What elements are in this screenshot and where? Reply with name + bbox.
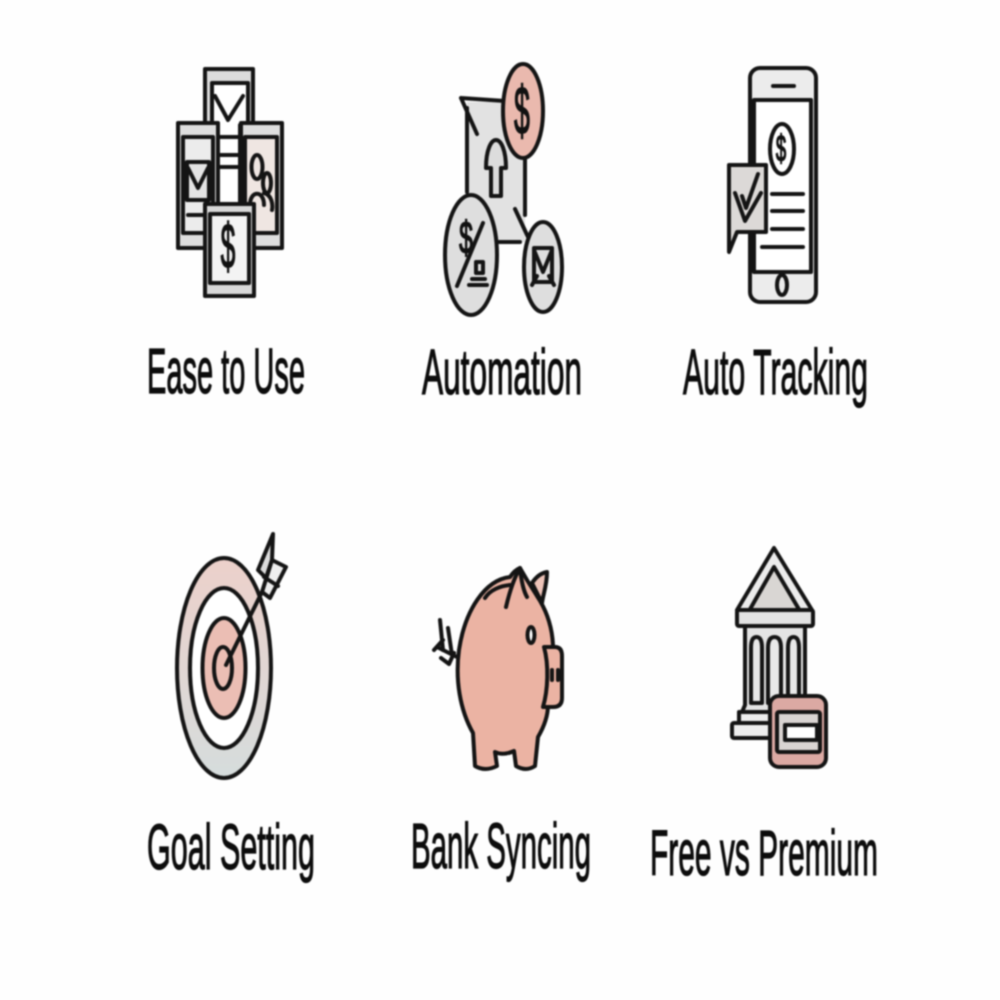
- target rings: [177, 558, 271, 778]
- icon: automation: [445, 64, 562, 315]
- coin slot and ear: [485, 568, 527, 607]
- pig body: [458, 568, 553, 769]
- right contacts card: [241, 123, 282, 248]
- left mail card: [178, 123, 218, 248]
- text lines: [762, 194, 803, 247]
- cost coin: [445, 195, 497, 315]
- premium card: [770, 696, 826, 767]
- top mail card: [205, 69, 253, 209]
- phone body: [750, 68, 816, 302]
- icon: bank with card: [732, 548, 826, 767]
- document with upload arrow: [461, 98, 528, 242]
- home button: [777, 275, 787, 295]
- icon: ease to use cards: [178, 69, 282, 296]
- dollar badge: $: [776, 129, 786, 170]
- bottom dollar card: [205, 204, 254, 296]
- mail coin: [524, 222, 562, 312]
- pediment: [737, 548, 812, 611]
- back ear: [532, 572, 547, 603]
- arrow: [226, 534, 286, 665]
- dollar badge: [770, 124, 794, 174]
- columns: [742, 626, 805, 712]
- dollar coin: [503, 64, 543, 158]
- text: Automation: [422, 336, 582, 408]
- cost coin: $: [459, 212, 473, 263]
- icon: piggy bank: [434, 568, 562, 769]
- text: Goal Setting: [147, 811, 315, 883]
- bottom dollar card: $: [221, 212, 235, 282]
- steps: [732, 712, 775, 738]
- entablature: [737, 610, 813, 626]
- snout: [543, 647, 562, 707]
- text: Bank Syncing: [411, 810, 591, 882]
- eye: [528, 627, 534, 643]
- text: Ease to Use: [147, 335, 305, 407]
- check bubble: [729, 165, 766, 252]
- phone screen: [754, 100, 811, 272]
- icon: auto tracking phone: [729, 68, 816, 302]
- speaker: [773, 84, 794, 88]
- dollar coin: $: [514, 74, 530, 150]
- tail: [434, 620, 457, 664]
- centre panel: [218, 125, 240, 210]
- icon: goal target: [177, 534, 286, 778]
